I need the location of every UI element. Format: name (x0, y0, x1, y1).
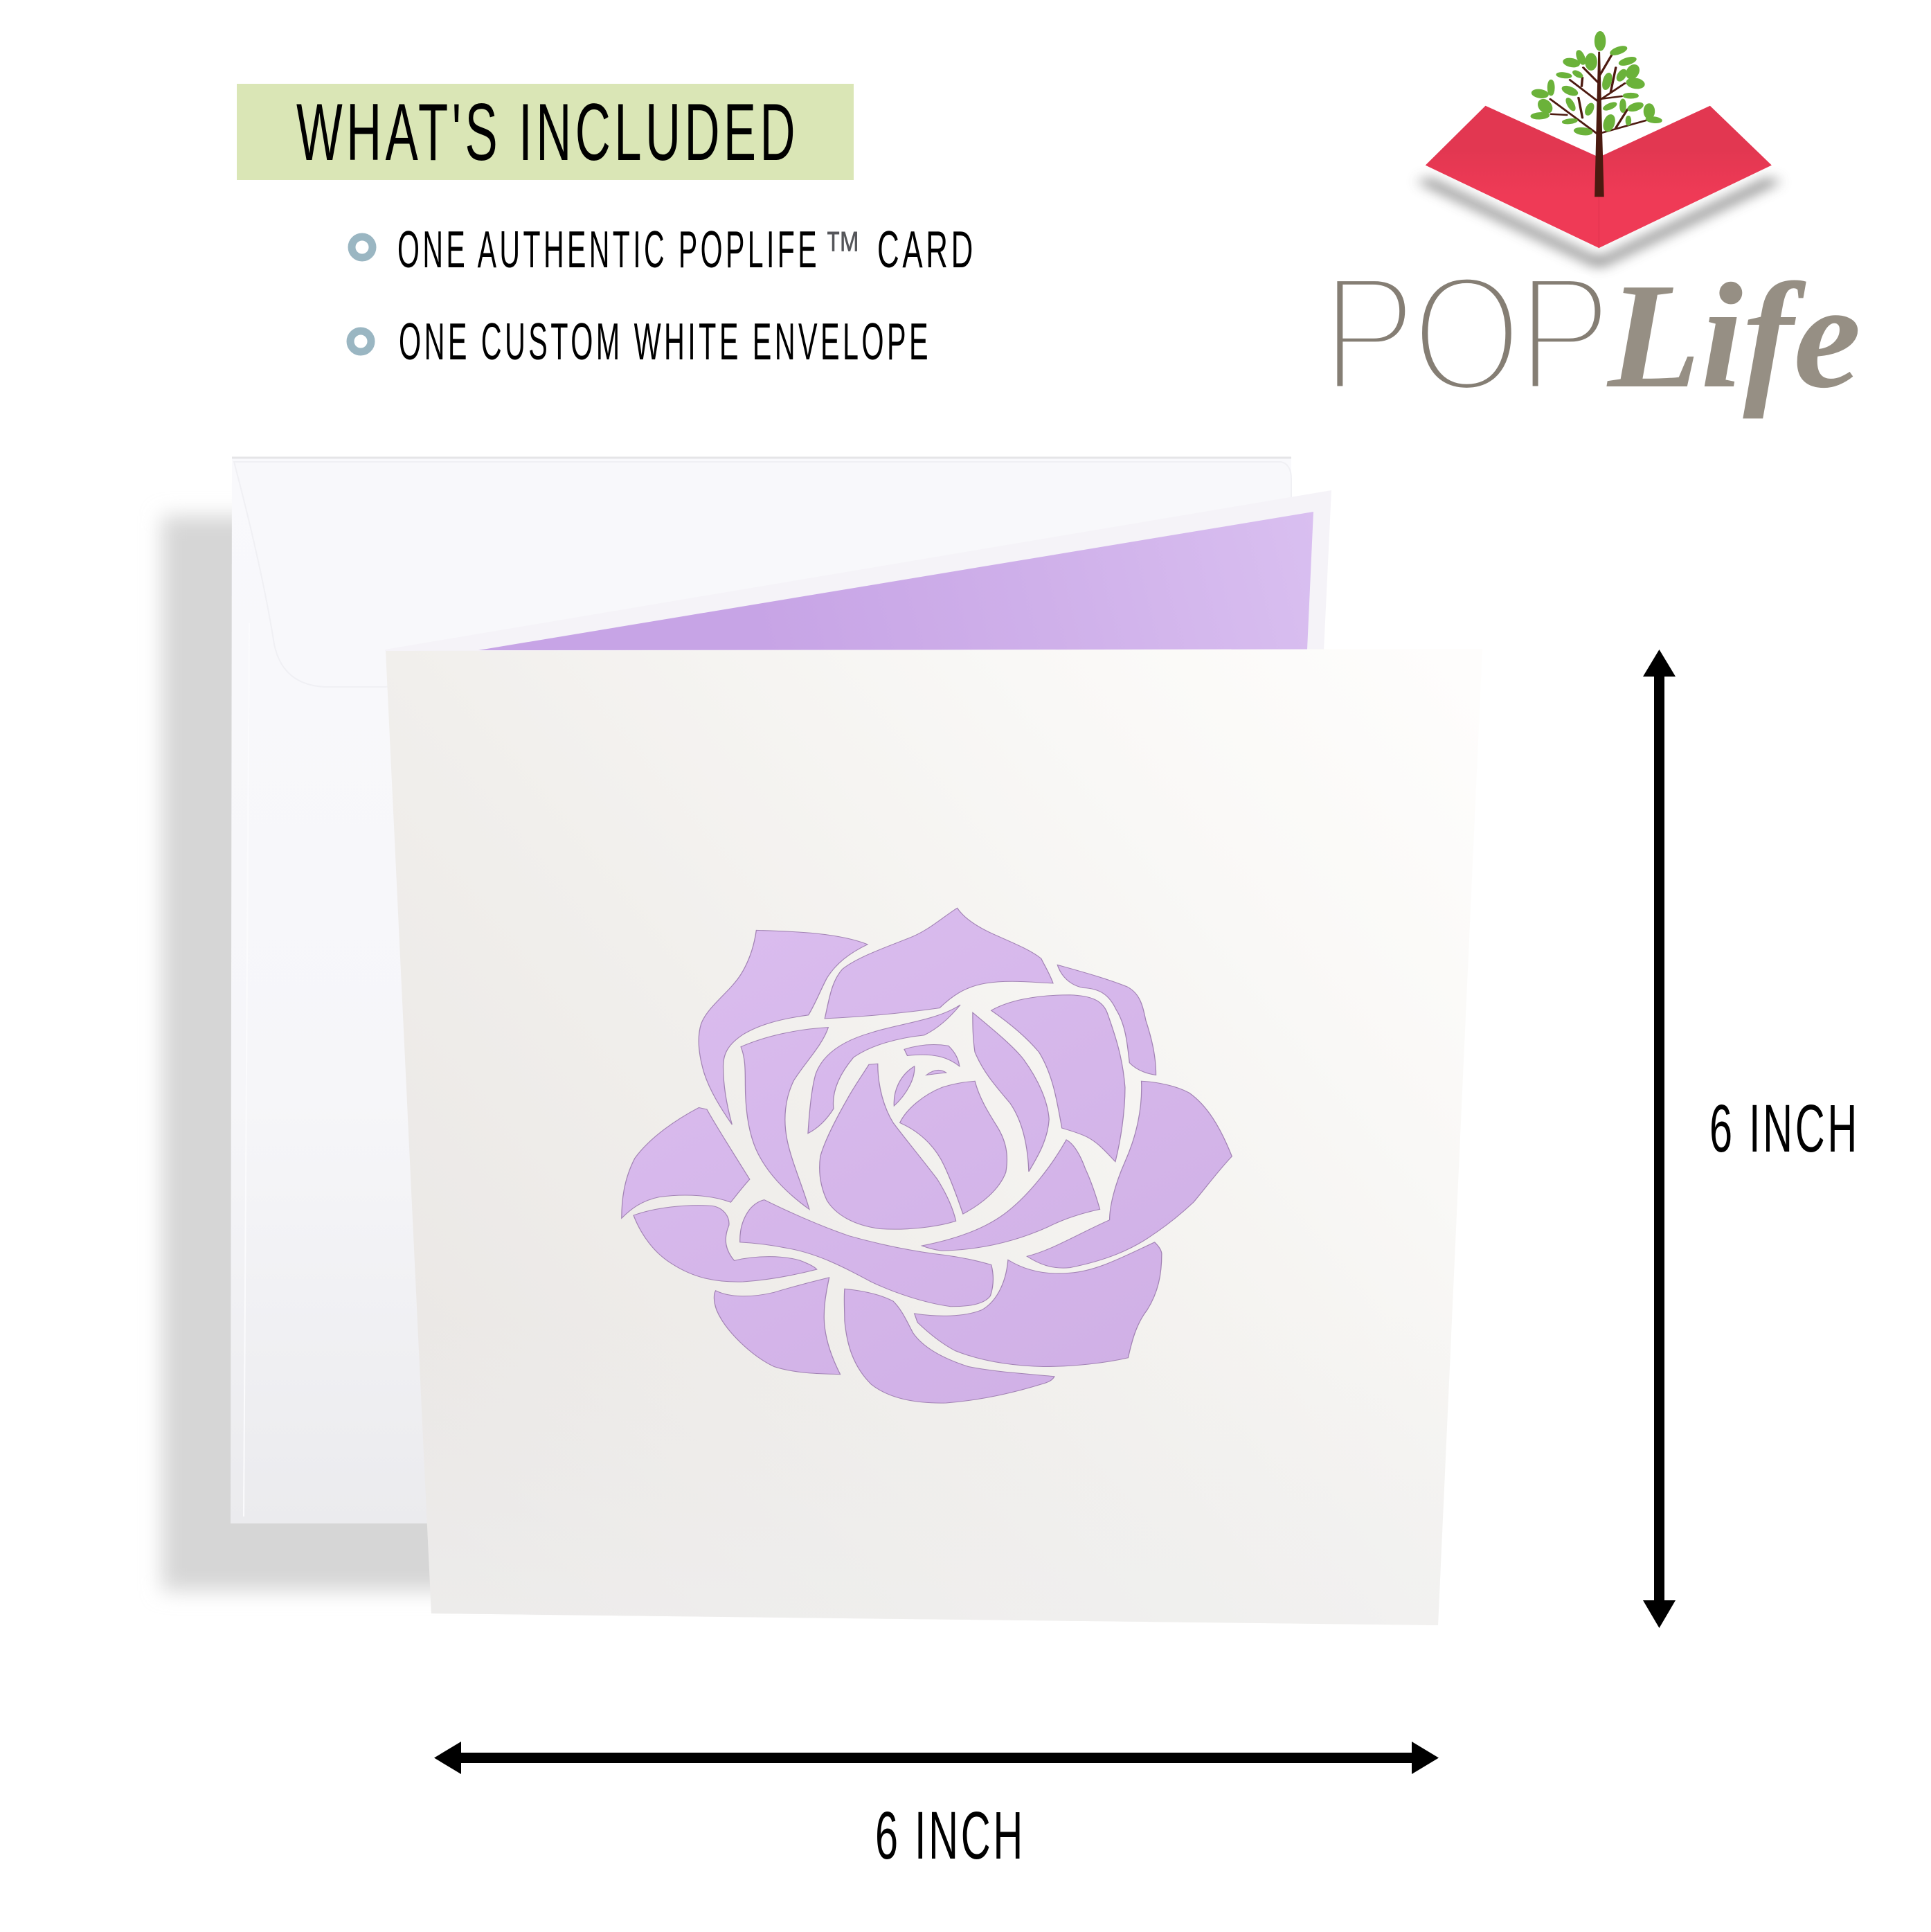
petal: lower left (634, 1206, 817, 1282)
heading text: WHAT'S INCLUDED (296, 87, 799, 177)
logo: PopLife (1322, 32, 1861, 426)
petal: bud outer right (973, 1012, 1049, 1172)
list item: card: ONE AUTHENTIC POPLIFE (397, 220, 820, 278)
envelope shadow (162, 516, 647, 1591)
petal: crescent (808, 1005, 960, 1134)
list item: envelope (350, 312, 931, 370)
petal: bottom left (714, 1278, 841, 1375)
petal: bottom right (915, 1242, 1162, 1366)
petal: bud right (900, 1081, 1007, 1214)
card front (386, 649, 1482, 1625)
petal: centre band (740, 1200, 993, 1307)
arrow: height dimension (1643, 650, 1676, 1628)
petal: far right (1027, 1081, 1232, 1268)
logo mark: book and tree (1421, 32, 1777, 269)
petal: top left (699, 930, 868, 1125)
petal: lower right inner (922, 1140, 1100, 1251)
rose cut-out (622, 908, 1232, 1403)
card inner fold (385, 490, 1331, 651)
petal: top (825, 908, 1053, 1019)
bullet icon (350, 331, 371, 352)
label: width: 6 INCH (875, 1798, 1025, 1873)
purple inner paper (478, 512, 1313, 650)
envelope (231, 458, 1291, 1523)
envelope flap (234, 462, 1291, 687)
bullet icon (352, 237, 372, 258)
petal: bottom centre (844, 1289, 1054, 1403)
petal: inner right (991, 995, 1125, 1162)
list item: card: ™ (824, 220, 861, 278)
fold edge (385, 490, 1331, 651)
petal: inner left (741, 1028, 828, 1209)
petal: far left (622, 1107, 750, 1218)
petal: centre slivers (894, 1045, 960, 1106)
heading banner (237, 84, 854, 180)
list item: envelope: ONE CUSTOM WHITE ENVELOPE (399, 312, 931, 370)
envelope body (231, 458, 1291, 1523)
petal: bud left (820, 1064, 956, 1229)
list item: card: CARD (877, 220, 976, 278)
logo wordmark POP: POP (1322, 241, 1607, 426)
arrow: width dimension (434, 1742, 1439, 1774)
logo wordmark Life: Life (1606, 253, 1861, 420)
petal: top right (1057, 965, 1156, 1075)
